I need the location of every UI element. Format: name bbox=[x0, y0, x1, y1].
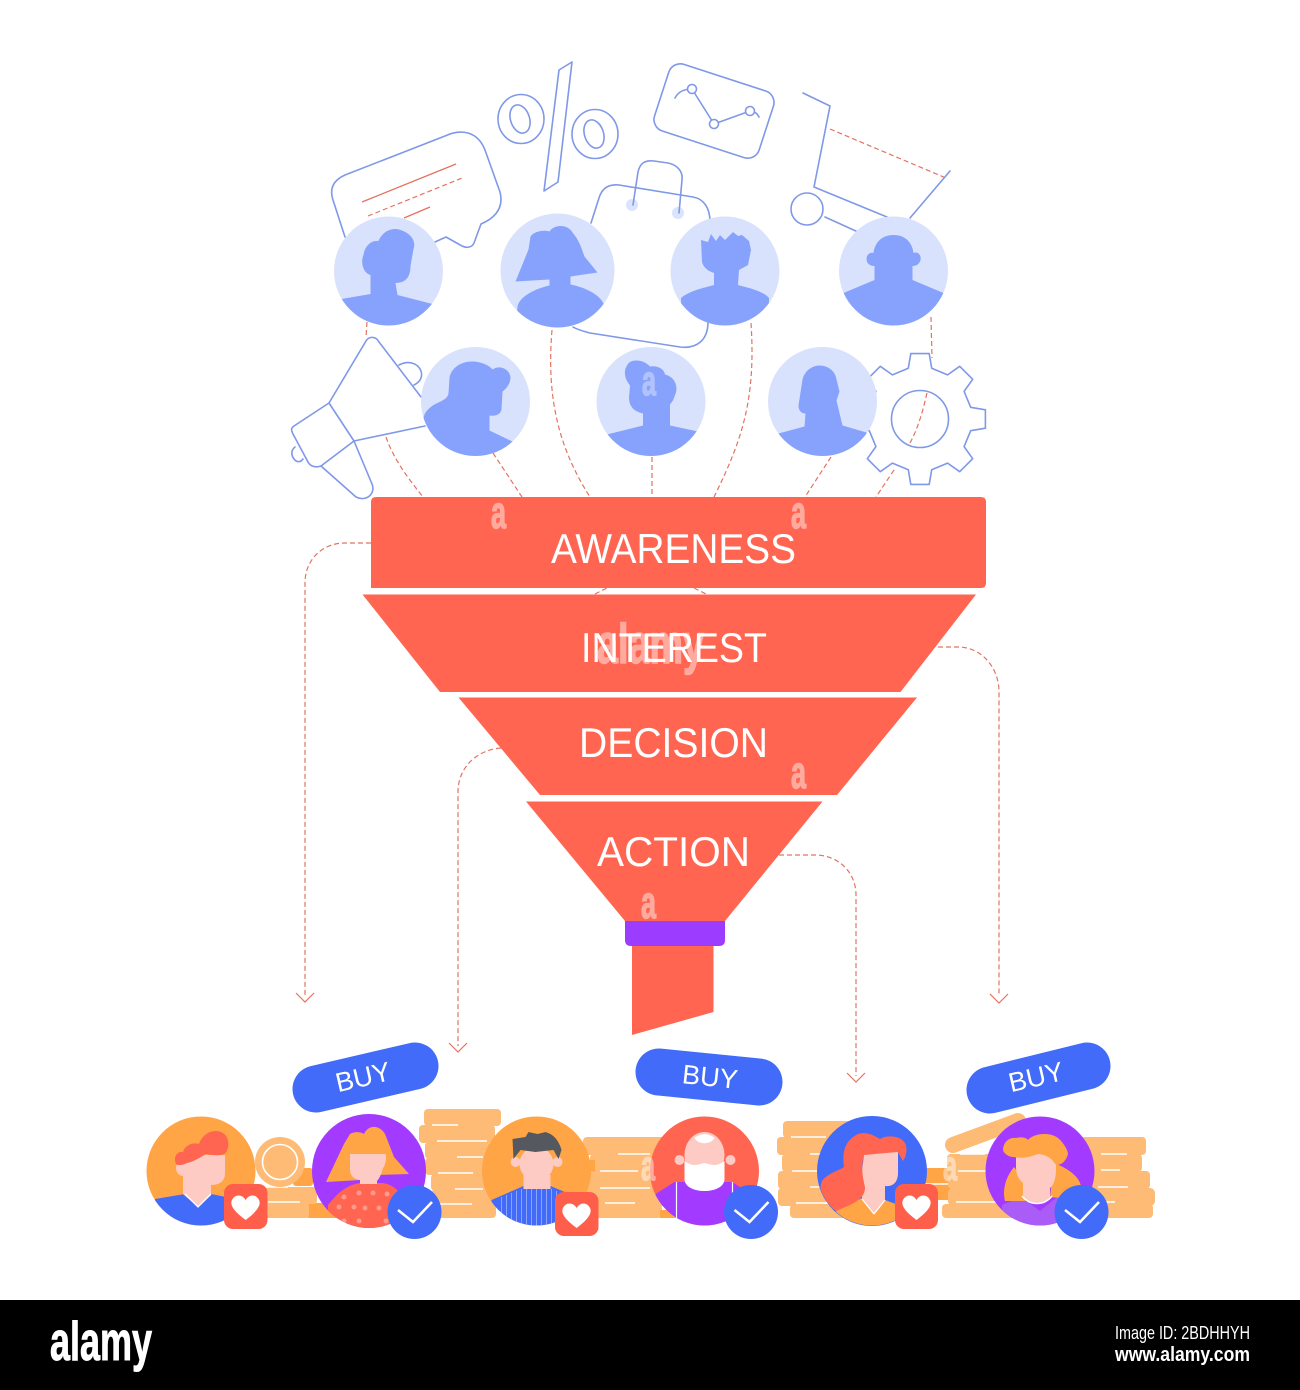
BUY button 2: BUY bbox=[681, 1059, 739, 1095]
icon: gear bbox=[855, 354, 985, 484]
watermark letters: a bbox=[943, 1142, 957, 1189]
funnel stage: decision: a bbox=[791, 747, 807, 798]
customer: woman with orange bob bbox=[312, 1114, 426, 1231]
icon: speech bubble bbox=[332, 132, 501, 247]
funnel stage: awareness: a bbox=[491, 487, 507, 538]
avatar: person 4 bbox=[839, 216, 948, 331]
coins: stack 4 bbox=[777, 1121, 957, 1218]
footer bar bbox=[0, 1300, 1300, 1390]
badge: heart 1 bbox=[224, 1184, 268, 1229]
customer: woman with curly orange hair bbox=[986, 1116, 1094, 1231]
dashed arrow: decision to customers bbox=[449, 748, 501, 1052]
avatar: person 3 bbox=[670, 216, 780, 331]
BUY button 2 bbox=[659, 1059, 759, 1095]
audience avatars bbox=[334, 214, 948, 462]
badge: check 3 bbox=[1054, 1185, 1108, 1239]
avatar: person 1 bbox=[334, 216, 443, 331]
BUY button 3 bbox=[990, 1056, 1087, 1098]
funnel stage: action: a bbox=[641, 877, 657, 928]
dashed arrow: interest to customers bbox=[938, 647, 1008, 1003]
coins: stack 3 bbox=[583, 1137, 676, 1218]
footer website: www.alamy.com bbox=[1114, 1344, 1250, 1366]
funnel stage: interest: alamy bbox=[597, 612, 704, 675]
avatar: person 7 bbox=[768, 347, 877, 462]
dashed arrow: awareness to customers bbox=[296, 543, 371, 1002]
icon: shopping bag bbox=[573, 161, 710, 347]
customer: woman with long red hair bbox=[817, 1116, 927, 1231]
coin stacks bbox=[255, 1109, 1155, 1218]
funnel stage: action: ACTION bbox=[597, 828, 750, 875]
funnel stage: decision: DECISION bbox=[579, 719, 768, 766]
icon: line chart card bbox=[651, 61, 777, 161]
funnel collar bbox=[625, 921, 725, 946]
customer: man with dark hair bbox=[482, 1116, 591, 1231]
dashed connectors from audience to funnel bbox=[366, 317, 932, 594]
BUY button 1: BUY bbox=[333, 1056, 393, 1098]
avatar: person 2 bbox=[500, 214, 614, 330]
BUY button 3: BUY bbox=[1006, 1056, 1066, 1098]
funnel stage: awareness bbox=[371, 487, 986, 588]
badge: heart 2 bbox=[555, 1192, 598, 1236]
coins: stack 2 bbox=[419, 1109, 501, 1218]
funnel stage: interest bbox=[362, 594, 976, 692]
customer: old man with white beard bbox=[650, 1116, 759, 1231]
coins: stack 1 bbox=[255, 1137, 352, 1218]
customer: man with red hair bbox=[146, 1116, 256, 1231]
footer logo: alamy bbox=[50, 1310, 152, 1372]
line icons above the funnel bbox=[292, 61, 985, 499]
funnel stage: interest: INTEREST bbox=[581, 624, 767, 671]
watermark letters: a bbox=[642, 357, 656, 404]
icon: megaphone bbox=[292, 337, 425, 499]
watermark letters bbox=[641, 357, 957, 1189]
watermark letters: a bbox=[641, 1142, 655, 1189]
funnel spout bbox=[632, 945, 714, 1035]
avatar: person 6 bbox=[596, 347, 706, 462]
badge: heart 3 bbox=[895, 1184, 938, 1229]
funnel stage: awareness: a bbox=[791, 487, 807, 538]
customers row bbox=[146, 1114, 1108, 1239]
funnel stage: decision bbox=[458, 698, 917, 798]
avatar: person 5 bbox=[421, 347, 530, 462]
icon: percent sign bbox=[498, 62, 618, 191]
dashed arrow: action to customers bbox=[779, 855, 865, 1082]
funnel stage: awareness: AWARENESS bbox=[551, 525, 796, 572]
icon: shopping cart bbox=[791, 93, 950, 232]
coins: stack 5 bbox=[942, 1121, 1155, 1218]
badge: check 2 bbox=[724, 1185, 778, 1239]
BUY button 1 bbox=[316, 1056, 415, 1098]
footer image id: Image ID: 2BDHHYH bbox=[1115, 1323, 1250, 1343]
funnel bbox=[362, 487, 986, 1035]
badge: check 1 bbox=[388, 1185, 442, 1239]
funnel stage: action bbox=[526, 802, 822, 928]
